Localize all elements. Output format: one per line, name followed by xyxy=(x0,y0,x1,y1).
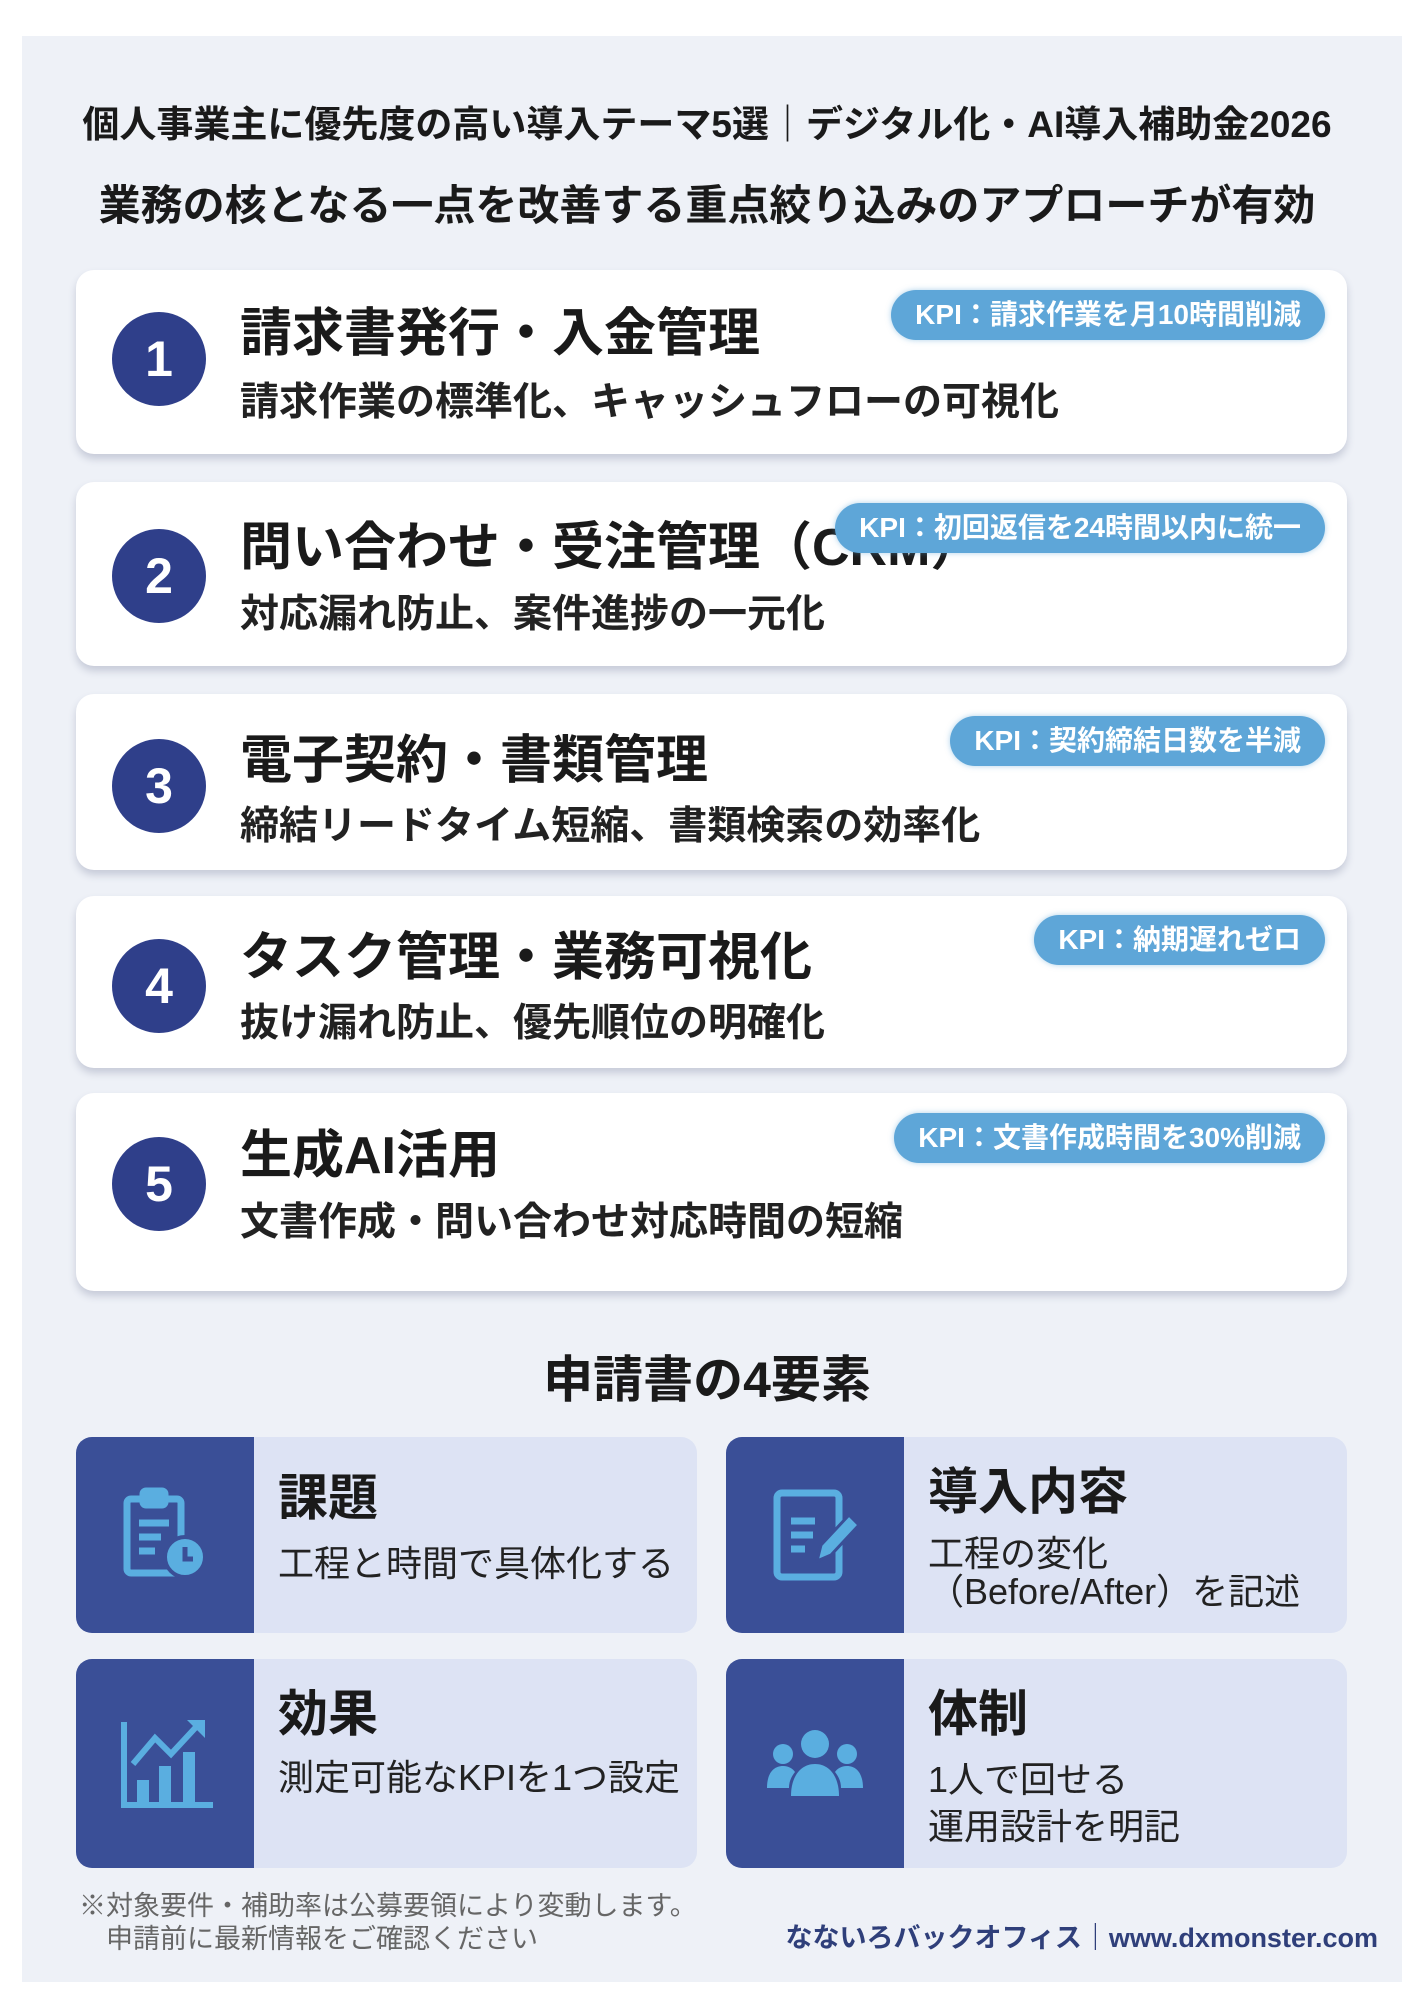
card 1 xyxy=(76,270,1347,454)
card 4 xyxy=(76,896,1347,1068)
tile: 効果 xyxy=(76,1659,697,1868)
number 4: 4 xyxy=(145,958,173,1014)
number 5 xyxy=(112,1137,206,1231)
KPI 3: KPI：契約締結日数を半減 xyxy=(974,725,1301,756)
icon: bar chart xyxy=(76,1659,254,1868)
icon: document pen xyxy=(726,1437,904,1633)
KPI 5 xyxy=(894,1113,1325,1163)
card 3 xyxy=(76,694,1347,870)
description 2: 対応漏れ防止、案件進捗の一元化 xyxy=(240,593,825,636)
heading 5: 生成AI活用 xyxy=(240,1127,500,1185)
description: （Before/After）を記述 xyxy=(928,1571,1300,1612)
description: 1人で回せる xyxy=(928,1759,1128,1800)
footer credit: なないろバックオフィス｜www.dxmonster.com xyxy=(785,1923,1378,1953)
KPI 4: KPI：納期遅れゼロ xyxy=(1058,924,1301,955)
number 2 xyxy=(112,529,206,623)
heading 1: 請求書発行・入金管理 xyxy=(240,305,760,363)
description: 工程と時間で具体化する xyxy=(278,1543,674,1584)
heading 4: タスク管理・業務可視化 xyxy=(240,929,812,987)
icon: clipboard clock xyxy=(76,1437,254,1633)
description 4: 抜け漏れ防止、優先順位の明確化 xyxy=(240,1002,825,1045)
title: 課題 xyxy=(278,1470,378,1526)
KPI 2: KPI：初回返信を24時間以内に統一 xyxy=(859,512,1301,543)
title: 個人事業主に優先度の高い導入テーマ5選｜デジタル化・AI導入補助金2026 xyxy=(82,104,1332,145)
number 4 xyxy=(112,939,206,1033)
tile: 導入内容 xyxy=(726,1437,1347,1633)
section heading: 申請書の4要素 xyxy=(543,1352,871,1408)
footer note: ※対象要件・補助率は公募要領により変動します。 xyxy=(79,1891,697,1921)
title: 効果 xyxy=(278,1686,378,1742)
description 1: 請求作業の標準化、キャッシュフローの可視化 xyxy=(240,381,1059,424)
number 1: 1 xyxy=(145,331,173,387)
description 5: 文書作成・問い合わせ対応時間の短縮 xyxy=(240,1201,903,1244)
footer note: 申請前に最新情報をご確認ください xyxy=(106,1924,538,1954)
description 3: 締結リードタイム短縮、書類検索の効率化 xyxy=(240,805,980,848)
number 3 xyxy=(112,739,206,833)
KPI 5: KPI：文書作成時間を30%削減 xyxy=(918,1122,1301,1153)
KPI 1: KPI：請求作業を月10時間削減 xyxy=(915,299,1301,330)
description xyxy=(928,1759,1180,1847)
description xyxy=(928,1533,1300,1612)
heading 2: 問い合わせ・受注管理（CRM） xyxy=(240,519,982,577)
number 5: 5 xyxy=(145,1156,173,1212)
number 3: 3 xyxy=(145,758,173,814)
KPI 2 xyxy=(835,503,1325,553)
number 1 xyxy=(112,312,206,406)
tile: 課題 xyxy=(76,1437,697,1633)
KPI 3 xyxy=(950,716,1325,766)
KPI 4 xyxy=(1034,915,1325,965)
description: 測定可能なKPIを1つ設定 xyxy=(278,1757,680,1798)
icon: people xyxy=(726,1659,904,1868)
title: 導入内容 xyxy=(928,1464,1128,1520)
tile: 体制 xyxy=(726,1659,1347,1868)
title: 体制 xyxy=(928,1686,1028,1742)
KPI 1 xyxy=(891,290,1325,340)
subtitle: 業務の核となる一点を改善する重点絞り込みのアプローチが有効 xyxy=(99,182,1315,229)
footer note xyxy=(79,1891,697,1954)
card 2 xyxy=(76,482,1347,666)
card 5 xyxy=(76,1093,1347,1291)
description: 運用設計を明記 xyxy=(928,1806,1180,1847)
heading 3: 電子契約・書類管理 xyxy=(240,732,708,790)
number 2: 2 xyxy=(145,548,173,604)
description: 工程の変化 xyxy=(928,1533,1108,1574)
